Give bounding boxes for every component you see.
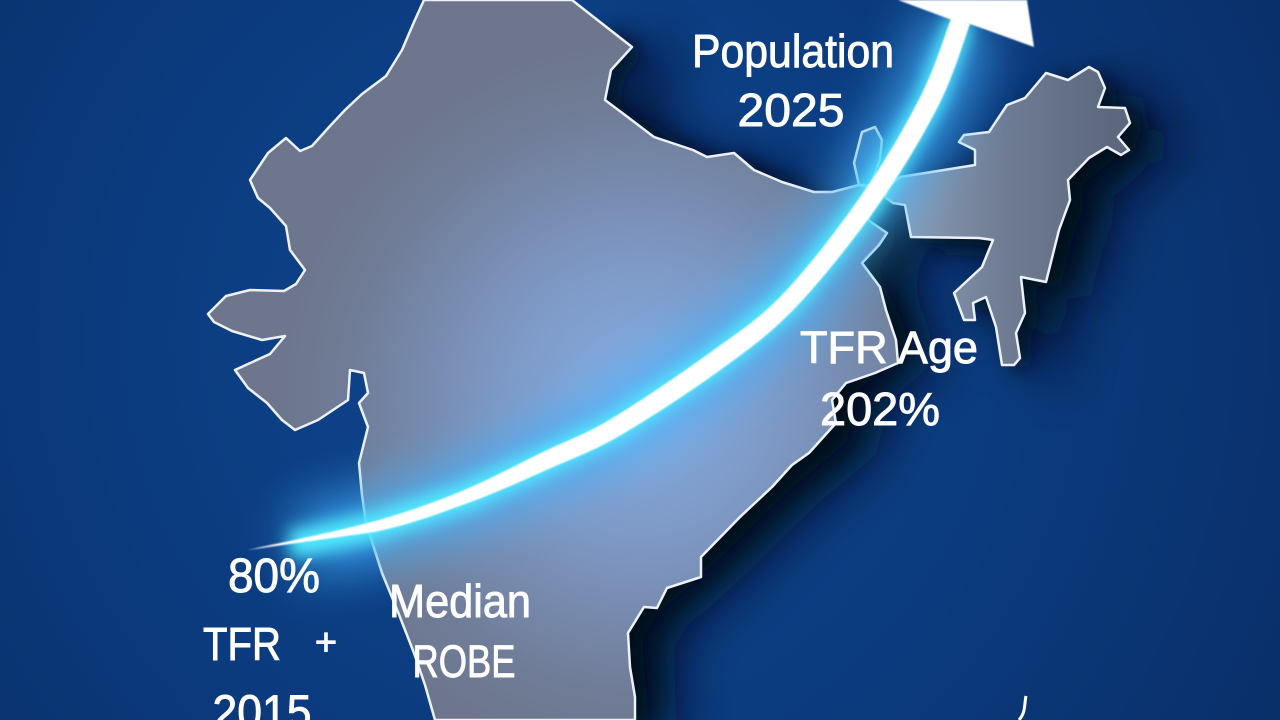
label: TFR age 202%	[800, 322, 978, 435]
arrow cyan glow	[290, 20, 961, 545]
label: median: Median	[389, 575, 531, 627]
label: 80% TFR 2015	[203, 550, 337, 720]
label: TFR age 202%: TFR Age	[800, 322, 978, 373]
label: population 2025: Population	[692, 25, 894, 77]
label: median	[389, 575, 531, 687]
label: 80% TFR 2015: 80%	[228, 550, 320, 603]
growth arrow	[248, 0, 1034, 550]
mainland	[208, 0, 898, 720]
label: 80% TFR 2015: +	[315, 622, 337, 664]
label: 80% TFR 2015: TFR	[203, 618, 281, 670]
sikkim outline	[854, 127, 882, 185]
label: population 2025: 2025	[738, 84, 844, 136]
label: TFR age 202%: 202%	[820, 383, 940, 435]
northeast states	[885, 67, 1130, 365]
label: population 2025	[692, 25, 894, 136]
label: median: ROBE	[412, 636, 516, 687]
wide map shadow	[544, 40, 1174, 720]
tight map shadow	[514, 28, 1144, 720]
arrow head	[898, 0, 1034, 47]
map of India	[208, 0, 1130, 720]
arrow body	[248, 16, 970, 550]
small coastline mark	[1019, 696, 1026, 720]
arrow wide glow	[300, 20, 961, 543]
